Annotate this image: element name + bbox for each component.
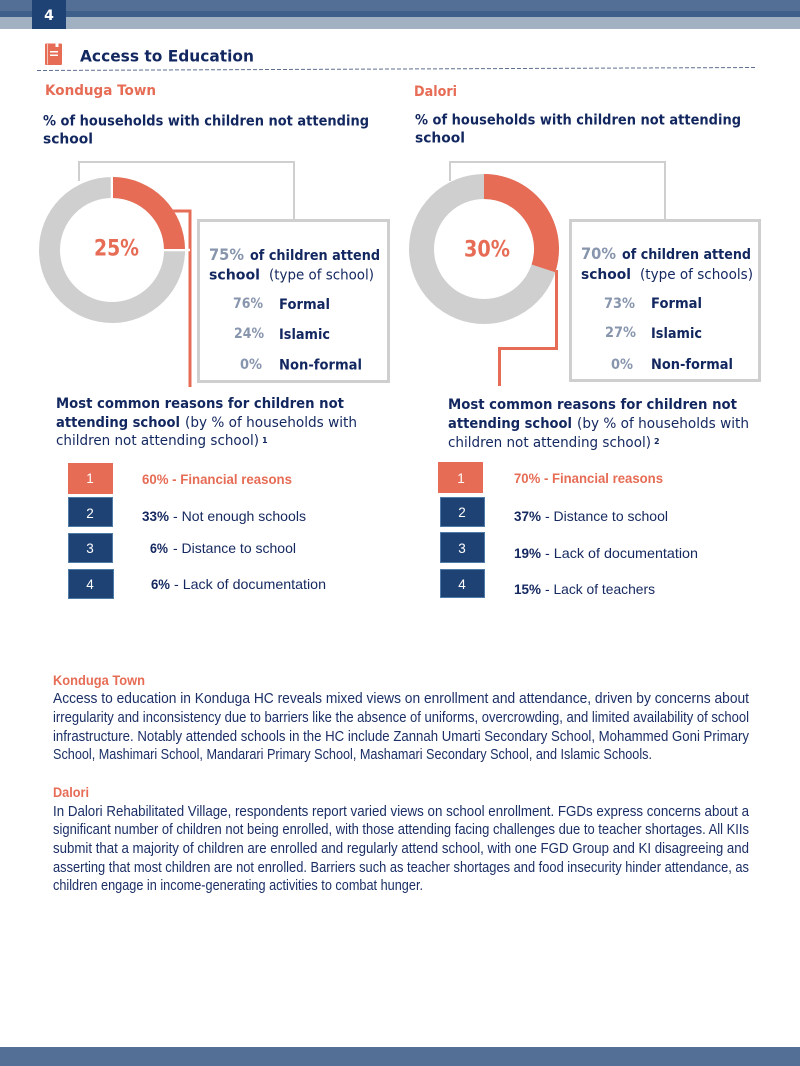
text block: Konduga Town: School, Mashimari School, Mandarari Primary School, Mashamari Secondary School, and Islamic Schools. <box>53 746 652 763</box>
panel: school types: (type of schools) <box>640 267 753 283</box>
connector: red <box>173 211 190 387</box>
title: Access to Education <box>80 46 254 66</box>
panel: school types: Formal <box>279 297 330 313</box>
heading: Konduga Town: Konduga Town <box>45 83 156 99</box>
connector: red <box>500 270 556 386</box>
text block: Dalori: Dalori <box>53 784 89 800</box>
rank list: 3 <box>86 541 94 556</box>
connector: grey <box>79 162 294 219</box>
rank list: 19% <box>514 545 542 561</box>
chart heading <box>415 112 741 146</box>
panel: school types: 0% <box>611 357 633 373</box>
panel: school types <box>570 220 760 380</box>
rank list: 4 <box>458 577 466 592</box>
reasons heading: attending school <box>448 416 572 432</box>
panel: Konduga reasons <box>56 396 357 598</box>
reasons heading: Most common reasons for children not <box>56 396 344 412</box>
rank list: - Lack of documentation <box>174 576 326 592</box>
panel: school types: 0% <box>240 357 262 373</box>
rank list: 60% - Financial reasons <box>142 471 292 487</box>
panel: school types: school <box>581 267 631 283</box>
panel: school types: 76% <box>233 296 263 312</box>
donut chart 25%: 25% <box>94 236 139 262</box>
reasons heading <box>56 396 357 449</box>
rank list: 70% - Financial reasons <box>514 470 663 486</box>
rank list: - Not enough schools <box>173 508 306 524</box>
reasons heading: attending school <box>56 415 180 431</box>
rank list: 6% <box>150 540 168 556</box>
reasons heading: children not attending school) <box>56 433 259 449</box>
panel: school types: (type of school) <box>269 268 374 284</box>
panel: school types: 70% <box>581 244 616 263</box>
footer band <box>0 1047 800 1066</box>
panel: Dalori reasons <box>438 397 749 598</box>
text block: Konduga Town: Access to education in Konduga HC reveals mixed views on enrollment and attendance, driven by concerns about <box>53 690 750 707</box>
panel: school types: 24% <box>234 326 264 342</box>
panel: school types: 75% <box>209 245 244 264</box>
reasons heading: 1 <box>262 436 268 445</box>
text block: Dalori: children engage in income-generating activities to combat hunger. <box>53 877 423 894</box>
panel: school types: Islamic <box>279 327 330 343</box>
panel: school types: of children attend <box>622 247 751 263</box>
donut chart 30% <box>422 174 559 312</box>
text block: Dalori <box>53 784 750 894</box>
connector: grey <box>450 162 665 219</box>
rank list: 1 <box>86 471 94 486</box>
panel: school types: Non-formal <box>651 357 733 373</box>
chart heading: % of households with children not attending <box>43 114 369 130</box>
rank list <box>438 462 698 598</box>
panel: school types: of children attend <box>250 248 380 264</box>
rank list: 2 <box>86 506 94 521</box>
panel: school types: Islamic <box>651 326 702 342</box>
chart heading <box>43 114 369 148</box>
heading: Dalori: Dalori <box>414 84 457 100</box>
rank list <box>68 463 326 598</box>
chart heading: school <box>415 130 465 146</box>
panel: school types: Non-formal <box>279 358 362 374</box>
panel: school types: Formal <box>651 296 702 312</box>
reasons heading <box>448 397 749 451</box>
chart heading: % of households with children not attending <box>415 112 741 128</box>
chart heading: school <box>43 132 93 148</box>
panel: school types: 27% <box>605 325 636 341</box>
rank list: 15% <box>514 581 542 597</box>
panel: school types <box>198 220 388 382</box>
panel: Konduga Town chart <box>43 83 388 387</box>
icon: book <box>45 43 62 65</box>
header band: 4 <box>44 8 54 24</box>
rank list: 2 <box>458 505 466 520</box>
reasons heading: 2 <box>654 437 660 446</box>
panel: school types: school <box>209 268 260 284</box>
reasons heading: children not attending school) <box>448 435 651 451</box>
text block: Konduga Town: Konduga Town <box>53 672 145 688</box>
rank list: 4 <box>86 577 94 592</box>
panel: Dalori chart <box>414 84 760 386</box>
rank list: 3 <box>458 541 466 556</box>
text block: Konduga Town <box>53 672 750 763</box>
rank list: 37% <box>514 508 542 524</box>
reasons heading: (by % of households with <box>577 416 749 432</box>
reasons heading: Most common reasons for children not <box>448 397 737 413</box>
rank list: - Distance to school <box>173 540 296 556</box>
donut chart 25% <box>50 170 190 312</box>
panel: school types: 73% <box>604 296 635 312</box>
rank list: 1 <box>457 471 465 486</box>
header band <box>0 0 800 29</box>
rank list: 6% <box>151 576 171 592</box>
rank list: - Distance to school <box>545 508 668 524</box>
rank list: - Lack of documentation <box>545 545 698 561</box>
reasons heading: (by % of households with <box>185 415 357 431</box>
donut chart 30%: 30% <box>464 238 510 262</box>
rank list: - Lack of teachers <box>545 581 655 597</box>
rank list: 33% <box>142 508 170 524</box>
